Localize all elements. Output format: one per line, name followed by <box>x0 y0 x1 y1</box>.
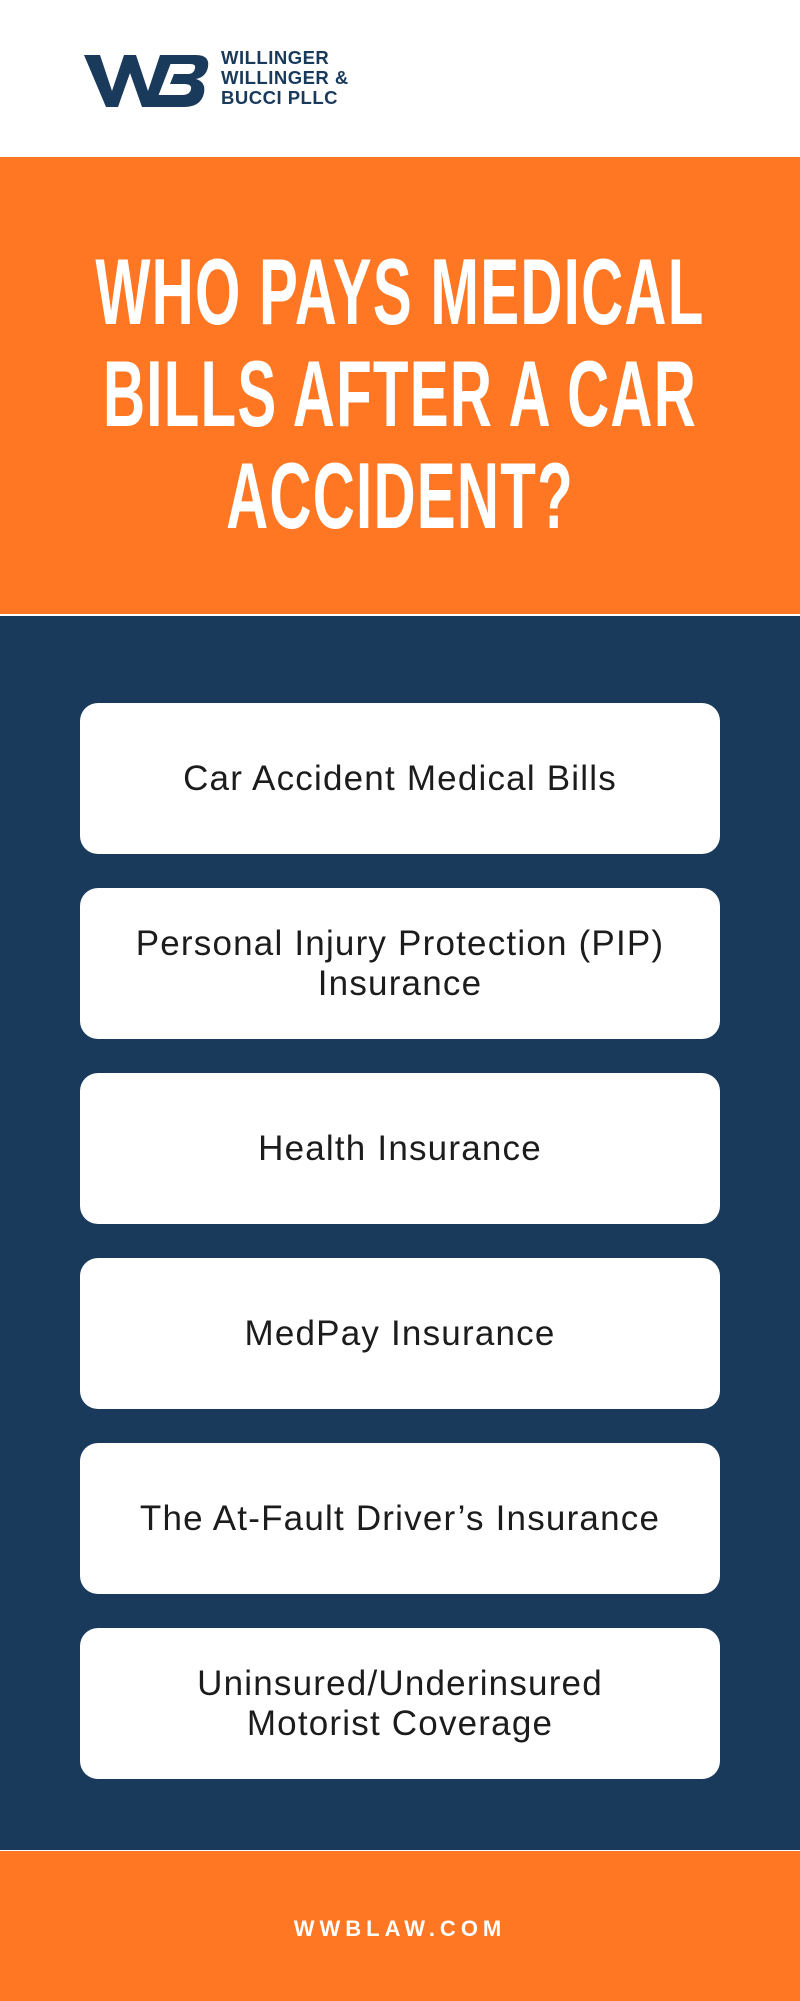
panel: list of payers <box>0 615 800 1850</box>
title: BILLS AFTER A CAR <box>103 341 697 446</box>
header: logo area <box>0 0 800 157</box>
logo text: BUCCI PLLC <box>221 87 338 108</box>
card: At-Fault Driver's Insurance: The At-Fault Driver’s Insurance <box>140 1498 660 1538</box>
logo text <box>221 47 349 108</box>
card: PIP Insurance: Insurance <box>318 964 482 1002</box>
card: MedPay Insurance: MedPay Insurance <box>244 1314 556 1352</box>
title: WHO PAYS MEDICAL <box>95 239 705 344</box>
footer website text: WWBLAW.COM <box>294 1916 506 1941</box>
card: PIP Insurance: Personal Injury Protection (PIP) <box>136 924 664 962</box>
card: Car Accident Medical Bills <box>80 703 720 854</box>
card: Health Insurance <box>80 1073 720 1224</box>
footer <box>0 1850 800 2001</box>
card: At-Fault Driver's Insurance <box>80 1443 720 1594</box>
title <box>95 239 705 548</box>
card: MedPay Insurance <box>80 1258 720 1409</box>
card: Car Accident Medical Bills: Car Accident Medical Bills <box>183 758 617 798</box>
card: Uninsured/Underinsured Motorist Coverage: Motorist Coverage <box>247 1704 553 1742</box>
logo text: WILLINGER & <box>221 67 349 88</box>
title banner <box>0 157 800 614</box>
card: PIP Insurance <box>80 888 720 1039</box>
icon: WB logo mark <box>84 55 208 107</box>
title: ACCIDENT? <box>226 443 574 548</box>
card: Health Insurance: Health Insurance <box>258 1128 542 1168</box>
card: Uninsured/Underinsured Motorist Coverage: Uninsured/Underinsured <box>197 1664 603 1702</box>
logo text: WILLINGER <box>221 47 329 68</box>
card: Uninsured/Underinsured Motorist Coverage <box>80 1628 720 1779</box>
